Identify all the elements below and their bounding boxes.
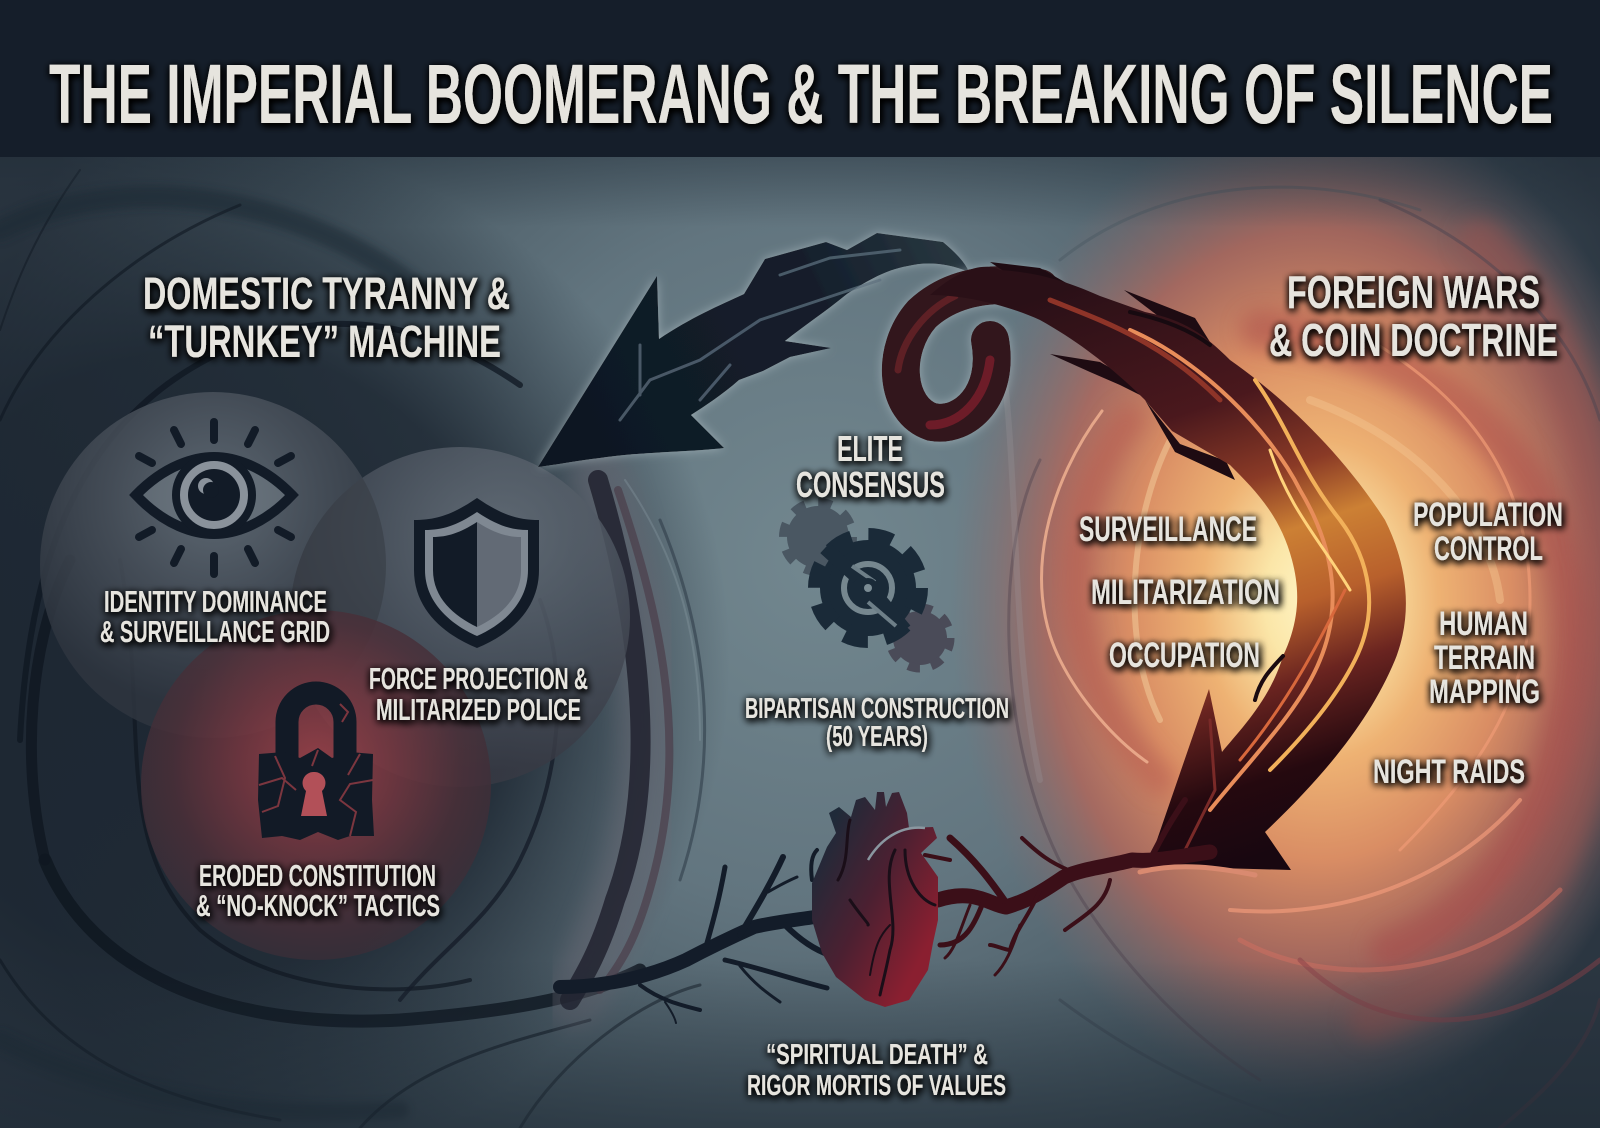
label: force projection: MILITARIZED POLICE	[376, 692, 581, 727]
heart body	[812, 792, 938, 1007]
small grey gear	[784, 503, 852, 571]
panel: domestic tyranny venn diagram	[40, 392, 630, 960]
arrow: dark boomerang arrow returning home	[538, 233, 969, 467]
label: spiritual death	[747, 1039, 1006, 1102]
label: bipartisan construction	[745, 693, 1009, 753]
main gear	[818, 538, 918, 638]
icon: eye	[136, 422, 292, 574]
label: bipartisan construction: (50 YEARS)	[826, 721, 928, 753]
label: spiritual death: RIGOR MORTIS OF VALUES	[747, 1070, 1006, 1102]
label: spiritual death: “SPIRITUAL DEATH” &	[766, 1039, 988, 1071]
labels: foreign wars right column	[1373, 496, 1563, 791]
red right roots	[925, 800, 1210, 975]
heading: domestic tyranny	[143, 268, 510, 367]
arrow: blood-red boomerang arrow with curl	[898, 262, 1406, 870]
venn overlap: surveillance and force	[294, 478, 386, 620]
icon: cracked padlock	[258, 693, 374, 840]
label: elite consensus: CONSENSUS	[796, 464, 945, 505]
label: bipartisan construction: BIPARTISAN CONSTRUCTION	[745, 693, 1009, 725]
label: eroded constitution: ERODED CONSTITUTION	[199, 858, 436, 893]
labels: foreign wars right column: MAPPING	[1429, 673, 1540, 711]
label: eroded constitution: & “NO-KNOCK” TACTICS	[196, 888, 440, 923]
icon: gears	[784, 503, 950, 668]
heading: domestic tyranny: DOMESTIC TYRANNY &	[143, 268, 510, 319]
label: identity dominance: IDENTITY DOMINANCE	[104, 584, 327, 619]
labels: foreign wars right column: CONTROL	[1434, 530, 1543, 568]
label: identity dominance: & SURVEILLANCE GRID	[100, 614, 330, 649]
background: dark left vortex	[0, 157, 900, 1128]
venn circle: surveillance	[40, 392, 386, 738]
icon: shield	[414, 498, 539, 648]
label: elite consensus	[796, 428, 945, 505]
arrow body and head	[930, 267, 1406, 870]
heading: domestic tyranny: “TURNKEY” MACHINE	[148, 316, 501, 367]
labels: foreign wars right column: TERRAIN	[1434, 639, 1535, 677]
label: identity dominance	[100, 584, 330, 649]
label: force projection	[369, 661, 588, 727]
arrow thorns	[990, 262, 1235, 480]
labels: foreign wars left column: SURVEILLANCE	[1079, 510, 1257, 549]
labels: foreign wars left column	[1079, 510, 1280, 675]
title band	[0, 0, 1600, 157]
icon: dying heart with roots	[560, 792, 1255, 1023]
heading: foreign wars	[1269, 266, 1558, 366]
label: elite consensus: ELITE	[837, 428, 903, 469]
labels: foreign wars left column: OCCUPATION	[1109, 636, 1260, 675]
label: eroded constitution	[196, 858, 440, 923]
labels: foreign wars left column: MILITARIZATION	[1091, 573, 1280, 612]
venn circle: force projection	[290, 447, 630, 787]
curl at tail	[901, 285, 1040, 423]
labels: foreign wars right column: HUMAN	[1439, 605, 1528, 643]
background: warm glow with swirl bands	[780, 100, 1600, 1128]
dark left roots	[560, 850, 830, 1023]
venn circle: constitution	[141, 610, 491, 960]
labels: foreign wars right column: NIGHT RAIDS	[1373, 753, 1525, 791]
small mauve gear	[890, 608, 950, 668]
label: force projection: FORCE PROJECTION &	[369, 661, 588, 696]
